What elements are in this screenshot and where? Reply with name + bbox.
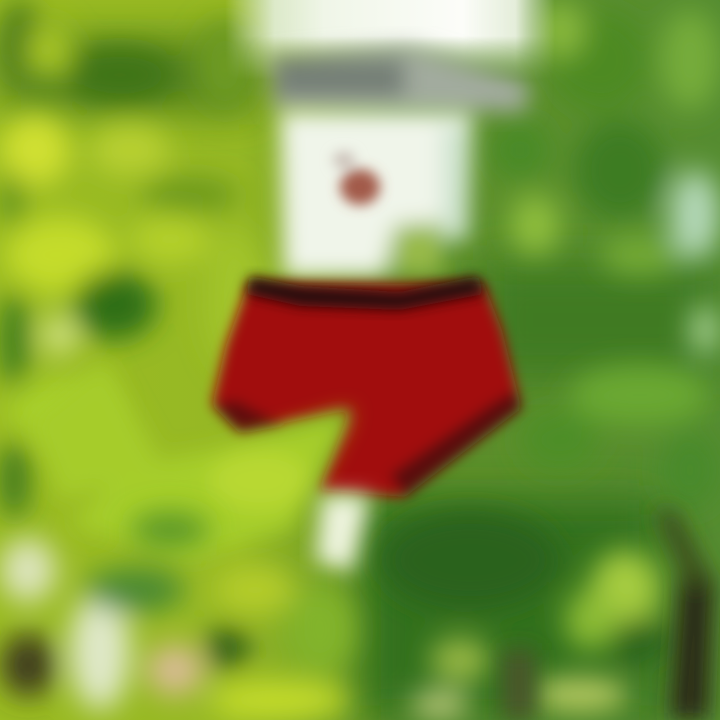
bottom left blossoms and foliage: [0, 512, 355, 720]
shirt sleeves grey band: [268, 46, 530, 112]
red shorts: [212, 284, 522, 497]
white shirt: [280, 112, 472, 276]
dark waistband: [246, 276, 484, 310]
sky gap at top: [225, 0, 555, 80]
foreground lime leaf: [30, 360, 352, 560]
shirt logo: [333, 152, 380, 205]
tree trunks: [503, 510, 714, 720]
white patch below shorts: [316, 495, 370, 572]
